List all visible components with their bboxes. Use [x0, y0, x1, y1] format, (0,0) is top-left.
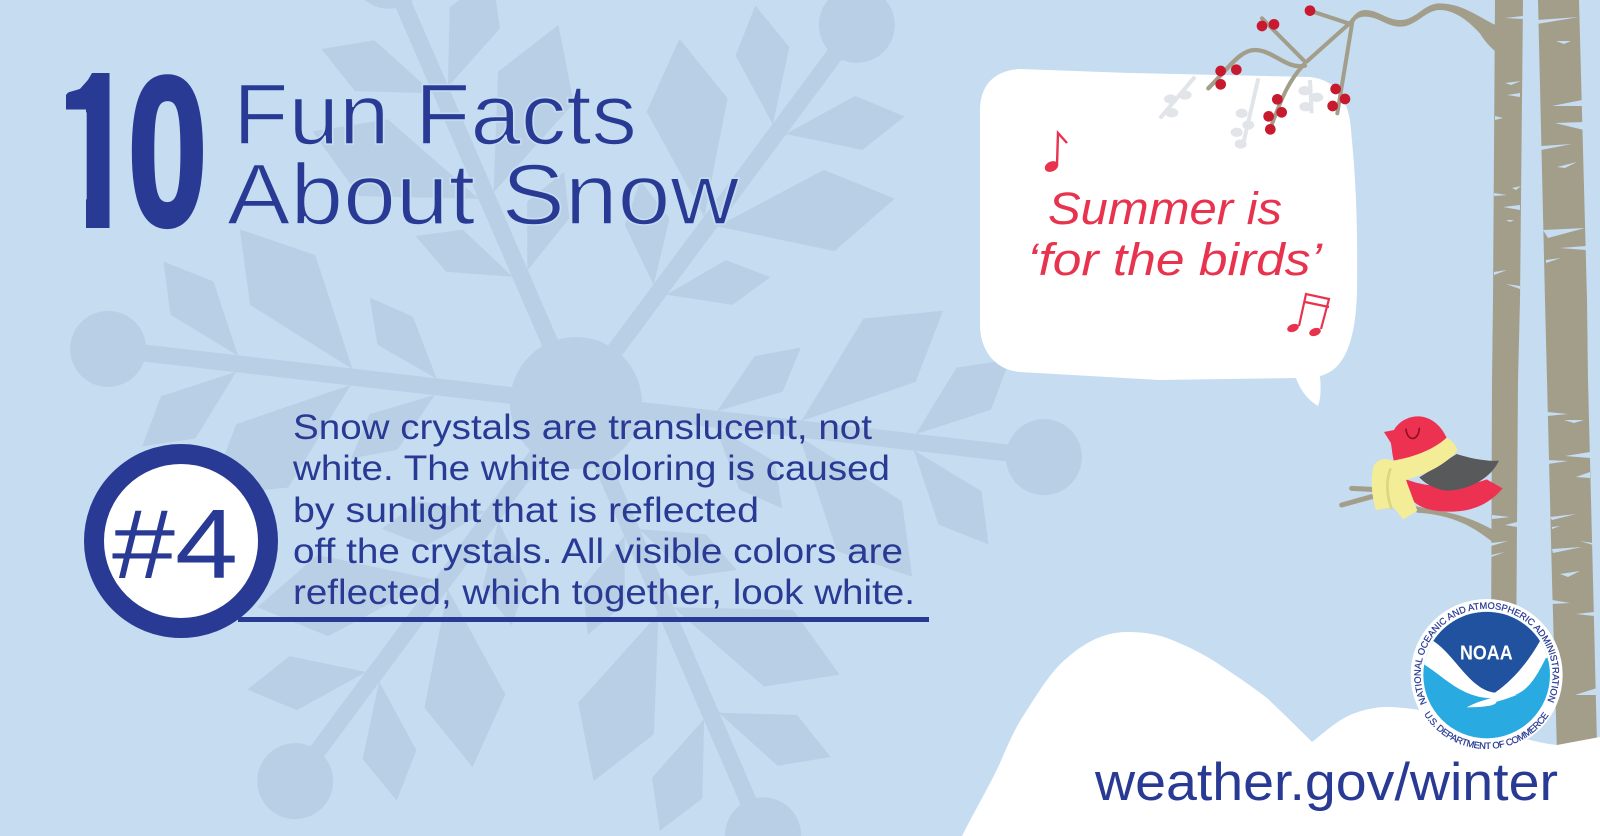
title number 10 — [66, 73, 203, 230]
icon: double music note — [1286, 294, 1329, 338]
fact text: white. The white coloring is caused — [292, 449, 890, 488]
tree bark marks — [1491, 16, 1597, 695]
icon: music note — [1043, 133, 1067, 174]
speech bubble text: ‘for the birds’ — [1027, 234, 1323, 285]
title: Fun Facts About Snow: Fun Facts — [233, 67, 637, 163]
speech bubble text — [1027, 183, 1323, 285]
fact text — [292, 408, 915, 612]
NOAA logo — [1410, 599, 1563, 750]
snowflake background — [55, 0, 1097, 836]
fact text: Snow crystals are translucent, not — [293, 408, 872, 447]
title: Fun Facts About Snow — [227, 67, 740, 243]
berry branch — [1208, 3, 1496, 135]
snow hill — [962, 632, 1600, 836]
fact text: off the crystals. All visible colors are — [293, 532, 903, 571]
underline rule — [238, 617, 929, 622]
speech bubble text: Summer is — [1048, 183, 1282, 234]
fact text: by sunlight that is reflected — [293, 491, 759, 530]
bird with scarf on branch — [1342, 416, 1503, 543]
NOAA logo: U.S. DEPARTMENT OF COMMERCE — [1425, 711, 1549, 750]
speech bubble — [980, 69, 1357, 406]
tree trunks — [1491, 0, 1597, 752]
NOAA logo: NATIONAL OCEANIC AND ATMOSPHERIC ADMINISTRATION — [1414, 602, 1560, 705]
fact number badge: #4 — [112, 489, 238, 599]
fact text: reflected, which together, look white. — [293, 573, 915, 612]
website URL: weather.gov/winter — [1094, 753, 1558, 812]
title number 10: 0 — [128, 33, 208, 271]
fact number badge — [94, 454, 268, 628]
title: Fun Facts About Snow: About Snow — [227, 147, 740, 243]
branch shadow on bubble — [1160, 77, 1323, 149]
title number 10: 1 — [58, 28, 134, 276]
NOAA logo: NOAA — [1460, 641, 1513, 664]
